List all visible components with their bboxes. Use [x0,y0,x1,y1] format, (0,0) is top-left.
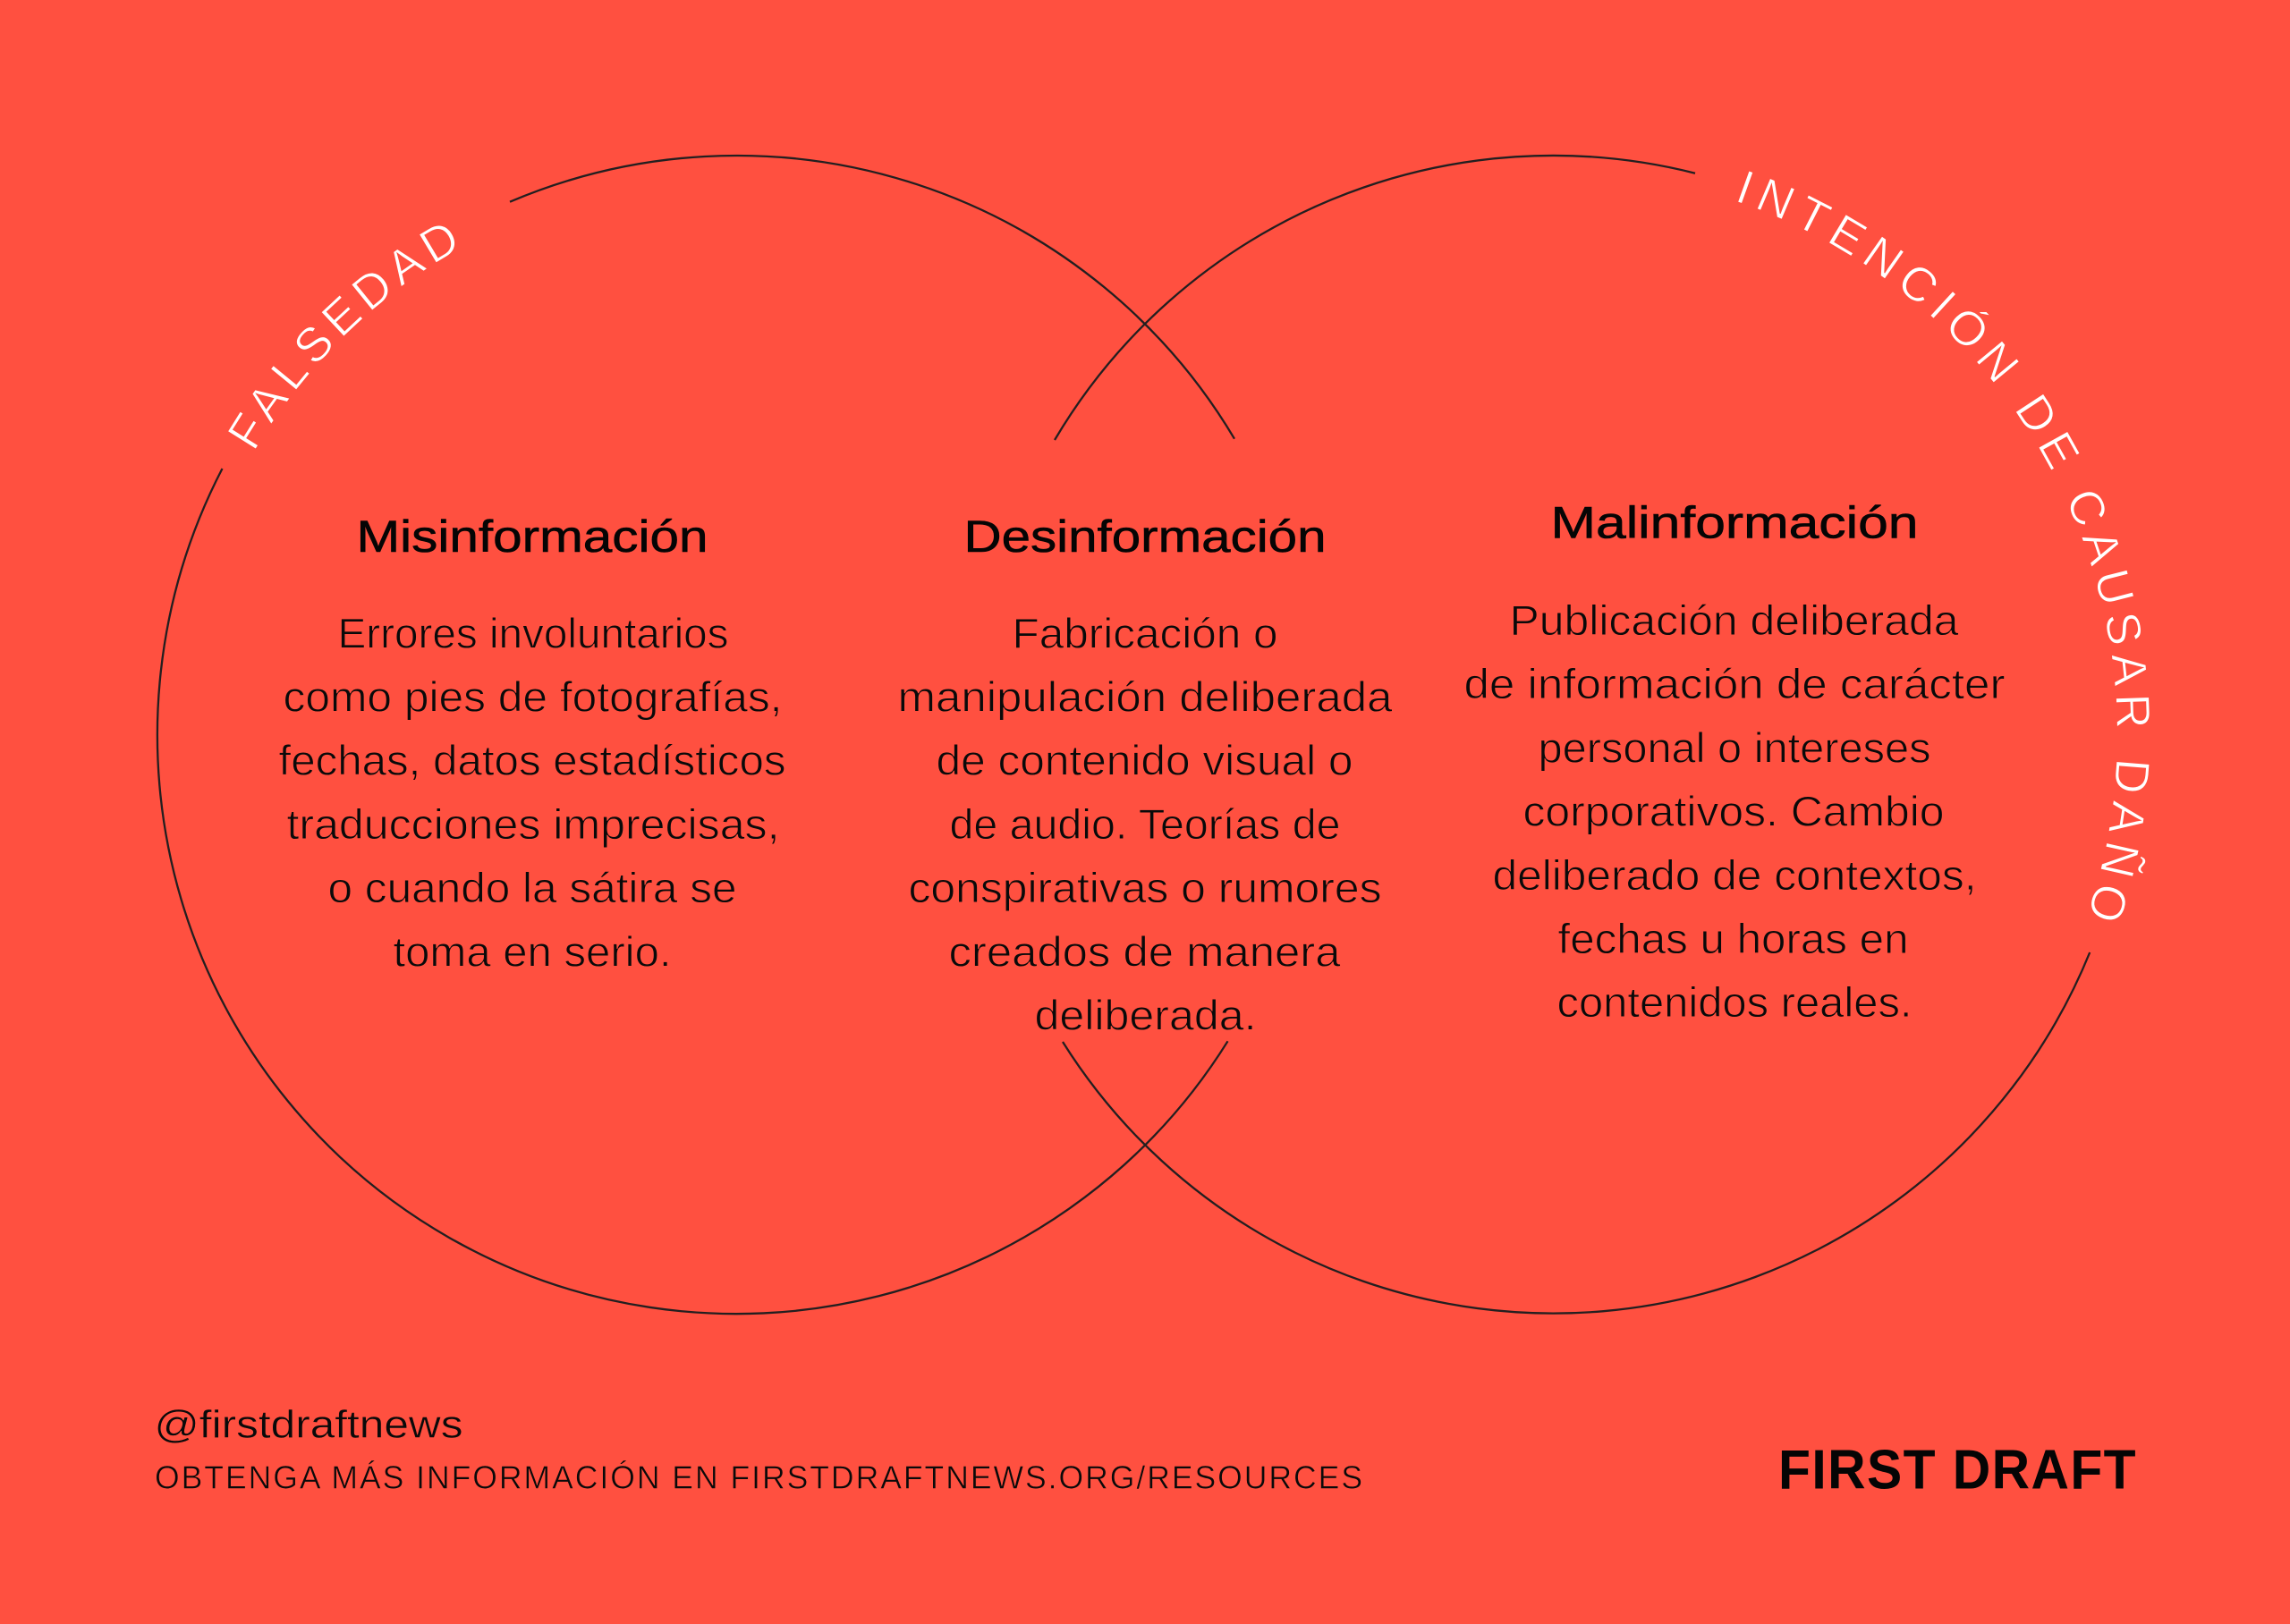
heading: malinformación: Malinformación [1551,497,1918,547]
text block: misinformación description: Errores involuntarios [338,609,728,656]
text block: malinformación description: corporativos. Cambio [1522,788,1945,835]
curved label: intención de causar daño: INTENCIÓN DE CAUSAR DAÑO [1738,172,2150,919]
panel: desinformación [898,512,1393,1039]
venn circle: falsedad (left) [157,156,1234,1314]
venn circle: intención de causar daño (right) [1055,156,2090,1314]
text block: malinformación description: deliberado de contextos, [1492,851,1977,899]
heading: misinformación: Misinformación [356,512,708,562]
text block: malinformación description: Publicación deliberada [1510,596,1959,644]
text block: desinformación description [898,609,1393,1039]
text block: malinformación description: contenidos reales. [1556,978,1913,1026]
text block: malinformación description: de información de carácter [1463,660,2006,707]
text block: desinformación description: de contenido visual o [936,737,1353,784]
text block: misinformación description: toma en serio. [394,927,671,975]
text block: malinformación description: personal o intereses [1539,723,1930,771]
text block: desinformación description: manipulación deliberada [898,672,1393,721]
text block: desinformación description: Fabricación o [1013,609,1277,656]
footer link text: OBTENGA MÁS INFORMACIÓN EN FIRSTDRAFTNEWS.ORG/RESOURCES [155,1459,1364,1496]
text block: misinformación description: o cuando la sátira se [327,864,737,911]
panel: malinformación [1463,497,2006,1026]
panel: misinformación [279,512,785,975]
text block: misinformación description: como pies de fotografías, [283,672,782,721]
text block: malinformación description [1463,596,2006,1026]
text block: desinformación description: de audio. Teorías de [950,800,1340,848]
text block: misinformación description: traducciones imprecisas, [286,800,780,848]
text block: malinformación description: fechas u horas en [1558,915,1909,962]
logo: first draft: FIRST DRAFT [1778,1440,2137,1501]
text block: desinformación description: creados de manera [948,927,1341,975]
text block: desinformación description: deliberada. [1034,991,1256,1039]
curved label: falsedad: FALSEDAD [228,225,454,449]
text block: desinformación description: conspirativas o rumores [909,864,1381,911]
text block: misinformación description: fechas, datos estadísticos [279,737,785,784]
heading: desinformación: Desinformación [964,512,1326,562]
text block: misinformación description [279,609,785,975]
footer handle: @firstdraftnews [154,1402,463,1447]
